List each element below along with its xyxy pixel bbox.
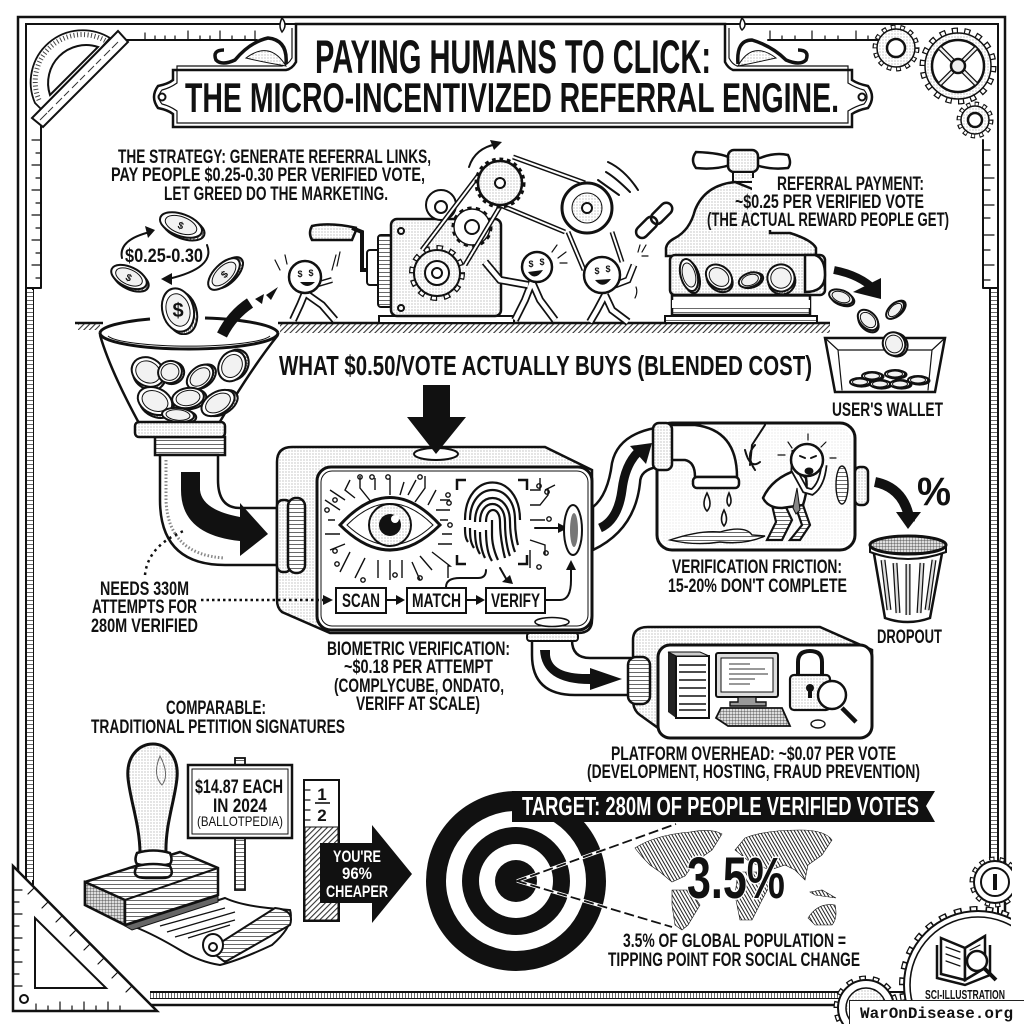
arrow and percent to dropout [875,470,951,529]
happy figure: left: $ [308,268,314,278]
biometric label: (COMPLYCUBE, ONDATO, [334,676,504,697]
dropout label: DROPOUT [877,627,942,648]
title plaque [154,18,872,127]
tipping point label: TIPPING POINT FOR SOCIAL CHANGE [608,950,860,971]
gear small bottom [837,979,895,1024]
water drops [704,493,731,526]
price sign: (BALLOTPEDIA) [197,813,283,829]
price sign: IN 2024 [213,796,267,817]
comparable heading: COMPARABLE: [166,698,266,719]
flow chart: scan match verify: MATCH [412,591,461,612]
falling coins with price cycle: $ [124,272,134,285]
output port and arrow [535,527,566,529]
icon: open book and magnifier [937,936,996,985]
payment arrow and falling coins [827,270,909,336]
scroll [135,898,291,965]
happy figure: left: $ [297,269,303,279]
falling coins with price cycle: $ [176,220,185,233]
3.5 percent figure: 3.5% [687,846,785,911]
callout: attempts needed [91,530,333,637]
falling coins with price cycle: $ [219,269,231,281]
referral payment label: ~$0.25 PER VERIFIED VOTE [735,192,924,213]
happy figure: middle [485,245,567,320]
heading: blended cost: WHAT $0.50/VOTE ACTUALLY BUYS (BLENDED COST) [279,350,812,381]
circuit traces [325,475,555,582]
sci-illustration gear badge [903,900,1024,1024]
bullseye target [426,791,606,971]
price sign [188,758,292,890]
protractor and ruler corner tool [31,30,128,127]
coin pipe into verification box [160,455,277,565]
referral payment label [707,174,949,231]
half measure bar: 1 [317,785,327,804]
biometric label: ~$0.18 PER ATTEMPT [344,657,493,678]
callout: attempts needed: NEEDS 330M [100,579,189,600]
comparable heading: TRADITIONAL PETITION SIGNATURES [91,717,345,738]
tipping point label: 3.5% OF GLOBAL POPULATION = [623,931,846,952]
happy figure: right: $ [594,266,600,276]
rubber stamp [85,744,218,930]
crack [745,425,765,470]
strategy text [111,147,431,205]
price sign: $14.87 EACH [195,777,283,798]
icon: padlock and magnifier [790,651,856,722]
cheaper arrow: YOU'RE [333,847,381,866]
falling coins with price cycle: $ [172,300,184,322]
happy figure: middle: $ [528,259,534,269]
cheaper arrow [320,825,412,923]
biometric label: VERIFF AT SCALE) [356,694,480,715]
icon: server [668,652,709,718]
half measure bar [304,780,339,921]
main verification box [277,447,592,633]
wallet label: USER'S WALLET [832,400,943,421]
title text [185,30,839,121]
overhead label [587,744,920,783]
falling coins with price cycle [107,207,248,338]
comparable heading [91,698,345,738]
black launch arrow [222,303,250,335]
overhead pipe [527,633,630,695]
dashed pointer lines [517,824,676,927]
faucet [670,425,737,477]
happy figure: middle: $ [539,257,545,267]
shelf line [75,323,830,333]
biometric label [327,639,510,715]
gear side bottom right [973,850,1024,910]
top gear pulley [477,160,523,206]
frustrated person [763,434,836,540]
strategy text: PAY PEOPLE $0.25-0.30 PER VERIFIED VOTE, [111,165,425,186]
panel: platform overhead [628,627,872,738]
gears: top right [876,28,992,135]
watermark: WarOnDisease.org [860,1005,1013,1023]
icon: keyboard [716,708,790,726]
cheaper arrow: CHEAPER [326,882,388,901]
icon: monitor [716,653,778,706]
icon: trash can [870,536,946,622]
motion arcs [469,144,497,167]
icon: mouse [811,720,825,728]
tipping point label [608,931,860,971]
referral payment label: REFERRAL PAYMENT: [777,174,924,195]
pipe to friction box [593,428,657,550]
happy figure: left [275,252,340,320]
right pulley [562,183,612,233]
referral machine [310,140,675,323]
set square [13,866,157,1011]
arrow and percent to dropout: % [917,470,951,514]
cheaper arrow: 96% [342,864,372,883]
user's wallet [825,327,945,392]
price label: $0.25-0.30 [125,246,203,267]
watermark [850,1000,1024,1024]
half measure bar: 2 [317,806,327,825]
coin press [665,150,957,323]
happy figure: right: $ [605,264,611,274]
callout: attempts needed: ATTEMPTS FOR [92,597,197,618]
gears [454,209,490,245]
flow chart: scan match verify: VERIFY [491,591,540,612]
title text: PAYING HUMANS TO CLICK: [315,30,711,83]
friction label [668,557,847,597]
icon: chain link [634,200,675,240]
strategy text: THE STRATEGY: GENERATE REFERRAL LINKS, [118,147,431,168]
overhead label: PLATFORM OVERHEAD: ~$0.07 PER VOTE [611,744,896,765]
biometric label: BIOMETRIC VERIFICATION: [327,639,510,660]
world map [635,830,836,930]
big down arrow [407,385,466,454]
callout: attempts needed: 280M VERIFIED [91,616,198,637]
icon: fingerprint [457,480,527,564]
flow chart: scan match verify [336,560,576,613]
icon: eye [340,498,440,550]
friction label: VERIFICATION FRICTION: [672,557,842,578]
strategy text: LET GREED DO THE MARKETING. [164,184,388,205]
belts [422,176,510,265]
flow chart: scan match verify: SCAN [342,591,380,612]
happy figure: right [584,245,648,322]
base and body [379,316,514,323]
crank [310,224,357,240]
puddle [670,529,765,544]
friction label: 15-20% DON'T COMPLETE [668,576,847,597]
panel: verification friction [653,423,868,550]
funnel of coins [100,287,278,455]
